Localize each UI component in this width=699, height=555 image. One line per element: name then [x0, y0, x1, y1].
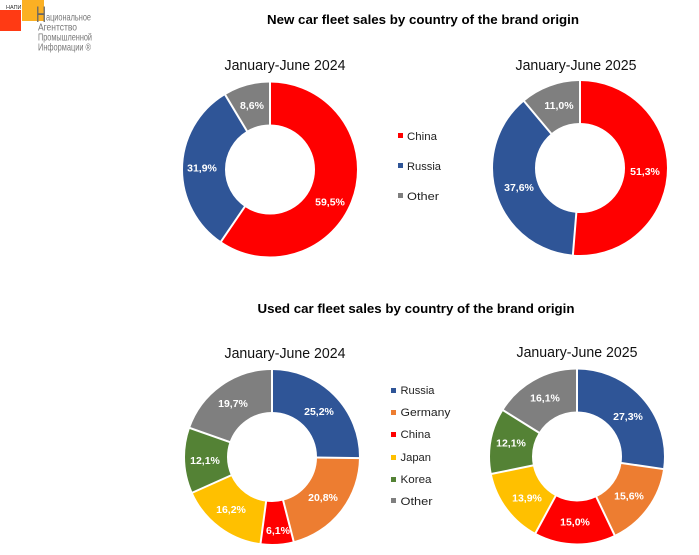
donut chart: used cars 2024: 20,8% [308, 492, 339, 504]
logo: ациональное [46, 12, 91, 24]
logo: Информации ® [38, 42, 91, 54]
logo: НАПИ [6, 5, 22, 11]
donut chart: used cars 2024: 6,1% [266, 525, 291, 537]
donut chart: new cars 2025: 11,0% [544, 100, 574, 112]
donut chart: used cars 2025: 16,1% [530, 392, 561, 404]
donut chart: new cars 2024: 8,6% [240, 100, 265, 112]
donut chart: new cars 2025: 37,6% [504, 182, 535, 194]
subtitle: new cars 2024: January-June 2024 [224, 58, 346, 74]
donut chart: new cars 2025: 51,3% [630, 166, 661, 178]
donut chart: new cars 2024 [187, 80, 346, 243]
legend: used cars: Germany [400, 407, 451, 419]
legend: used cars [391, 385, 451, 508]
legend: used cars: Russia [400, 385, 435, 397]
logo: Агентство [38, 22, 77, 34]
donut chart: new cars 2025 [504, 79, 661, 257]
donut chart: used cars 2024 [188, 368, 361, 545]
donut chart: used cars 2024: 19,7% [218, 398, 249, 410]
donut chart: used cars 2025: 13,9% [512, 492, 543, 504]
logo: Промышленной [38, 32, 92, 44]
title: used car fleet sales: Used car fleet sales by country of the brand origin [258, 302, 574, 316]
legend: used cars: Japan [400, 452, 431, 464]
legend: used cars: China [400, 429, 431, 441]
donut chart: new cars 2024: 31,9% [187, 162, 218, 174]
donut chart: used cars 2025 [490, 368, 665, 537]
legend: new cars: China [407, 131, 438, 143]
legend: used cars: Korea [400, 474, 432, 486]
subtitle: used cars 2024: January-June 2024 [224, 346, 346, 362]
donut chart: used cars 2025: 27,3% [613, 411, 644, 423]
legend: new cars [398, 131, 442, 203]
logo [0, 0, 92, 54]
legend: used cars: Other [400, 496, 433, 508]
legend: new cars: Russia [407, 161, 442, 173]
donut chart: used cars 2025: 12,1% [496, 438, 527, 450]
subtitle: new cars 2025: January-June 2025 [516, 58, 636, 74]
donut chart: new cars 2024: 59,5% [315, 196, 346, 208]
donut chart: used cars 2025: 15,0% [560, 516, 591, 528]
donut chart: used cars 2025: 15,6% [614, 490, 645, 502]
logo: Н [36, 2, 46, 27]
donut chart: used cars 2024: 12,1% [190, 455, 221, 467]
title: new car fleet sales: New car fleet sales by country of the brand origin [267, 13, 579, 27]
subtitle: used cars 2025: January-June 2025 [516, 345, 638, 361]
donut chart: used cars 2024: 25,2% [304, 406, 335, 418]
donut chart: used cars 2024: 16,2% [216, 504, 247, 516]
legend: new cars: Other [407, 191, 439, 203]
